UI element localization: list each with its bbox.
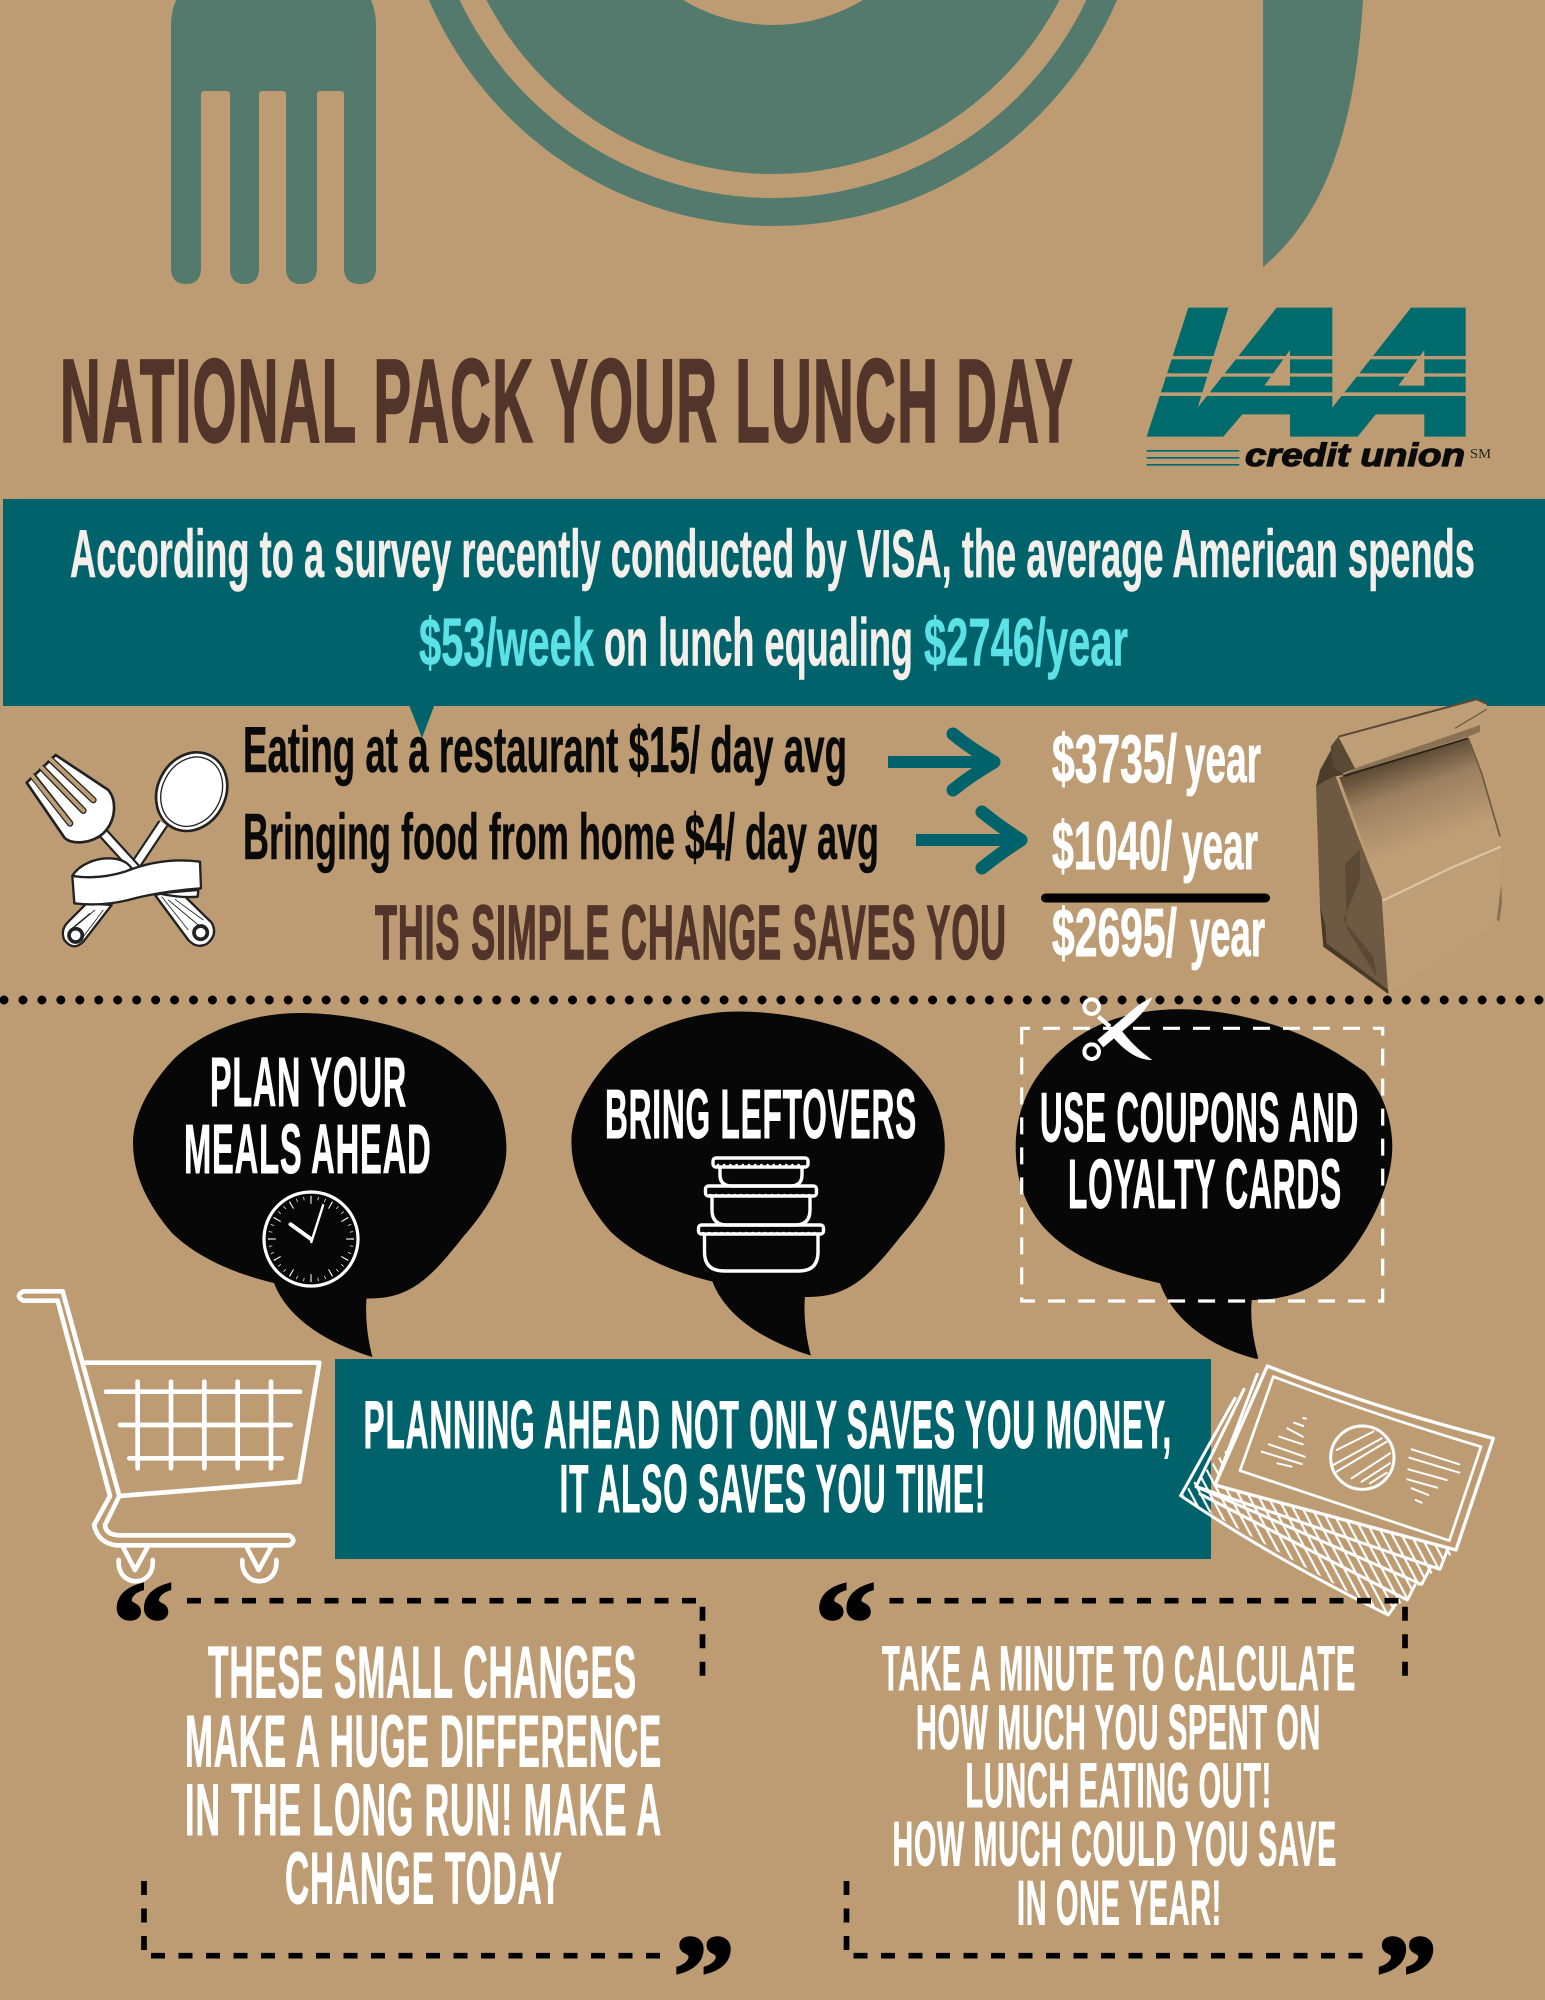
text: BRING LEFTOVERS (605, 1075, 917, 1153)
icon: large knife (1263, 0, 1363, 267)
quote text (882, 1634, 1356, 1938)
divider: dotted line (4, 996, 1545, 1004)
arrow: restaurant to yearly cost (888, 734, 994, 790)
icon: stack of money (1181, 1366, 1493, 1615)
quote text: CHANGE TODAY (285, 1838, 562, 1920)
quote text: IN ONE YEAR! (1017, 1868, 1222, 1938)
logo: IAA credit union (1143, 308, 1492, 473)
panel: planning ahead callout (335, 1359, 1211, 1559)
icon: scissors (1084, 997, 1152, 1060)
bubble text (1040, 1078, 1359, 1223)
callout text (364, 1387, 1172, 1527)
logo: IAA credit union: credit union (1245, 437, 1465, 473)
survey text line 2 (419, 604, 1128, 680)
dashed frame (144, 1601, 702, 1956)
lower handles (63, 890, 214, 946)
speech bubble: plan your meals ahead (133, 1013, 506, 1357)
icon: shopping cart (19, 1291, 319, 1581)
fork (27, 755, 137, 870)
survey text line 2: $53/week (419, 604, 594, 680)
quote box: calculate (814, 1557, 1438, 2000)
row: eating at a restaurant: Eating at a restaurant $15/ day avg (243, 713, 847, 786)
value: restaurant yearly cost: $3735/ (1052, 721, 1177, 797)
quote box: small changes (112, 1557, 735, 2000)
survey text line 2: $2746/year (924, 604, 1128, 680)
value: yearly savings: $2695/ (1052, 895, 1177, 971)
icon: fork and spoon with ribbon (27, 740, 241, 946)
quote box: small changes: IN THE LONG RUN! MAKE A (185, 1770, 662, 1851)
quote box: small changes: MAKE A HUGE DIFFERENCE (185, 1702, 662, 1782)
value: home yearly cost: $1040/ (1052, 808, 1172, 884)
row: bringing food from home: Bringing food from home $4/ day avg (243, 800, 879, 873)
icon: paper bag (1316, 699, 1502, 994)
coupon dashed border (1022, 1028, 1383, 1301)
quote box: small changes: THESE SMALL CHANGES (208, 1632, 637, 1714)
callout text: IT ALSO SAVES YOU TIME! (560, 1451, 986, 1527)
opening quote mark: “ (112, 1557, 174, 1688)
panel: survey banner (3, 499, 1545, 738)
speech bubble: use coupons and loyalty cards (1016, 1009, 1392, 1359)
dashed frame (846, 1601, 1405, 1956)
value: restaurant yearly cost: year (1185, 721, 1261, 797)
ribbon (72, 858, 201, 904)
divider: sum line (1041, 894, 1270, 902)
bubble text (184, 1043, 432, 1188)
icon: large fork (171, 0, 376, 284)
value: yearly savings: year (1190, 895, 1265, 971)
icon: stacked food containers (698, 1158, 824, 1271)
opening quote mark: “ (814, 1557, 876, 1688)
icon: plate (398, 0, 1148, 226)
spoon (137, 740, 241, 863)
survey text line 2: on lunch equaling (604, 604, 913, 680)
value: home yearly cost: year (1182, 808, 1258, 884)
arrow: home to yearly cost (916, 812, 1021, 868)
speech bubble: bring leftovers (571, 1012, 945, 1356)
icon: clock (264, 1192, 358, 1286)
bubble text: PLAN YOUR (210, 1043, 407, 1121)
logo: IAA credit union: SM (1470, 447, 1492, 462)
quote text (185, 1632, 662, 1920)
speech bubble: plan your meals ahead: MEALS AHEAD (184, 1110, 432, 1188)
